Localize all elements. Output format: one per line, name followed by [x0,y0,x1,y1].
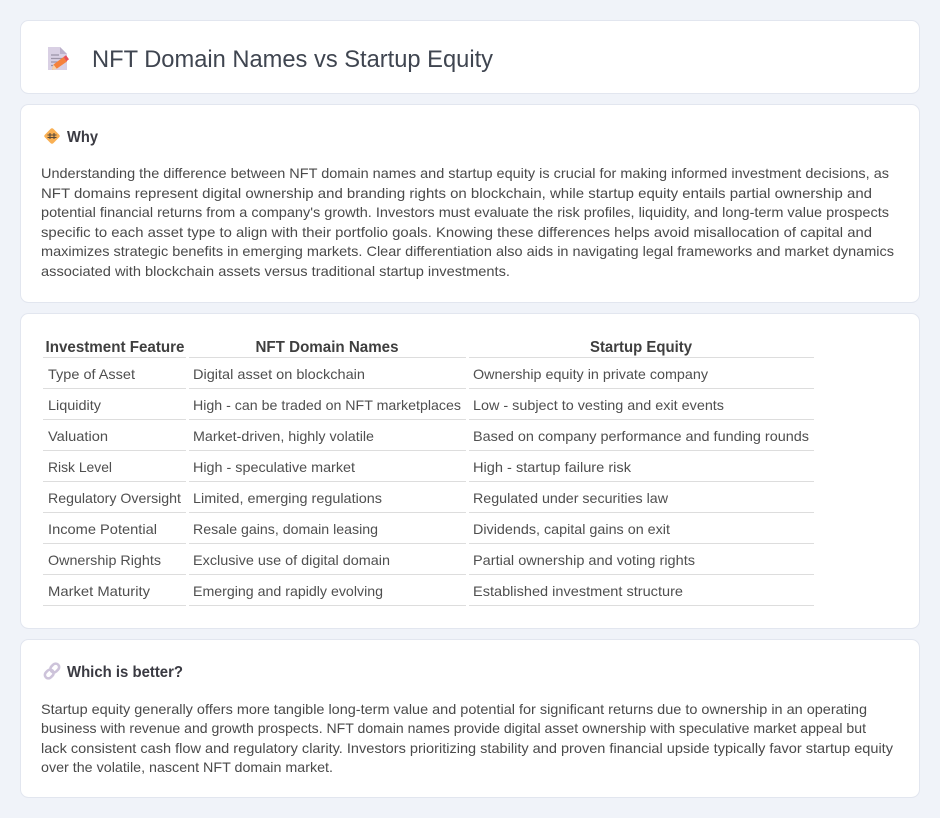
text block: which is better paragraph [41,701,893,775]
row: valuation: Market-driven, highly volatile [193,428,374,444]
table header row [46,339,692,356]
row: regulatory oversight [48,490,669,506]
panel: which is better [20,640,920,798]
row: market maturity: Emerging and rapidly evolving [193,583,383,599]
row: income potential: Income Potential [48,521,157,537]
row: ownership rights: Exclusive use of digital domain [193,552,390,568]
row: regulatory oversight: Regulated under securities law [473,490,669,506]
row: type of asset: Type of Asset [48,366,135,382]
icon: document with pencil [48,47,69,70]
table grid lines [43,358,814,606]
row: type of asset: Digital asset on blockchain [193,366,365,382]
row: valuation: Valuation [48,428,108,444]
row: market maturity: Established investment structure [473,583,683,599]
row: liquidity: Liquidity [48,397,101,413]
table header row: NFT Domain Names [256,339,399,356]
icon: diamond sign [44,128,60,144]
row: income potential: Resale gains, domain leasing [193,521,378,537]
row: ownership rights: Ownership Rights [48,552,161,568]
text block: why paragraph [41,165,894,279]
row: regulatory oversight: Regulatory Oversight [48,490,181,506]
row: risk level: High - startup failure risk [473,459,632,475]
text block: why paragraph: potential financial returns from a company's growth. Investors must evaluate the risk profiles, liquidity, and long-term value prospects [41,204,889,220]
text block: which is better paragraph: lack consistent cash flow and regulatory clarity. Investors prioritizing stability and proven financial upside typically favor startup equity [41,740,893,756]
row: liquidity [48,397,724,413]
icon: chain link [43,662,61,680]
text block: why paragraph: NFT domains represent digital ownership and branding rights on blockchain, while startup equity entails partial ownership and [41,185,872,201]
row: ownership rights: Partial ownership and voting rights [473,552,695,568]
text block: which is better paragraph: over the volatile, nascent NFT domain market. [41,759,333,775]
row: type of asset [48,366,708,382]
row: regulatory oversight: Limited, emerging regulations [193,490,382,506]
text block: why paragraph: maximizes strategic benefits in emerging markets. Clear differentiation also aids in navigating legal frameworks and market dynamics [41,243,894,259]
row: type of asset: Ownership equity in private company [473,366,708,382]
row: ownership rights [48,552,695,568]
text block: why paragraph: specific to each asset type to align with their portfolio goals. Knowing these differences helps avoid misallocation of capital and [41,224,872,240]
row: risk level: High - speculative market [193,459,355,475]
row: market maturity: Market Maturity [48,583,150,599]
row: liquidity: High - can be traded on NFT marketplaces [193,397,461,413]
row: income potential: Dividends, capital gains on exit [473,521,670,537]
row: risk level [48,459,632,475]
title: NFT Domain Names vs Startup Equity [92,46,493,73]
text block: why paragraph: associated with blockchain assets versus traditional startup investments. [41,263,510,279]
text block: which is better paragraph: Startup equity generally offers more tangible long-term value and potential for significant returns due to ownership in an operating [41,701,867,717]
heading: why: Why [67,129,98,146]
row: valuation: Based on company performance and funding rounds [473,428,809,444]
table header row: Investment Feature [46,339,185,356]
row: risk level: Risk Level [48,459,112,475]
row: valuation [48,428,809,444]
text block: which is better paragraph: business with revenue and growth prospects. NFT domain names provide digital asset ownership with speculative market appeal but [41,720,866,736]
heading: which is better: Which is better? [67,664,183,681]
row: income potential [48,521,670,537]
panel: header [20,20,920,94]
row: liquidity: Low - subject to vesting and exit events [473,397,724,413]
text block: why paragraph: Understanding the difference between NFT domain names and startup equity is crucial for making informed investment decisions, as [41,165,889,181]
panel: why [20,104,920,302]
panel: comparison table [20,314,920,628]
table header row: Startup Equity [590,339,692,356]
row: market maturity [48,583,683,599]
